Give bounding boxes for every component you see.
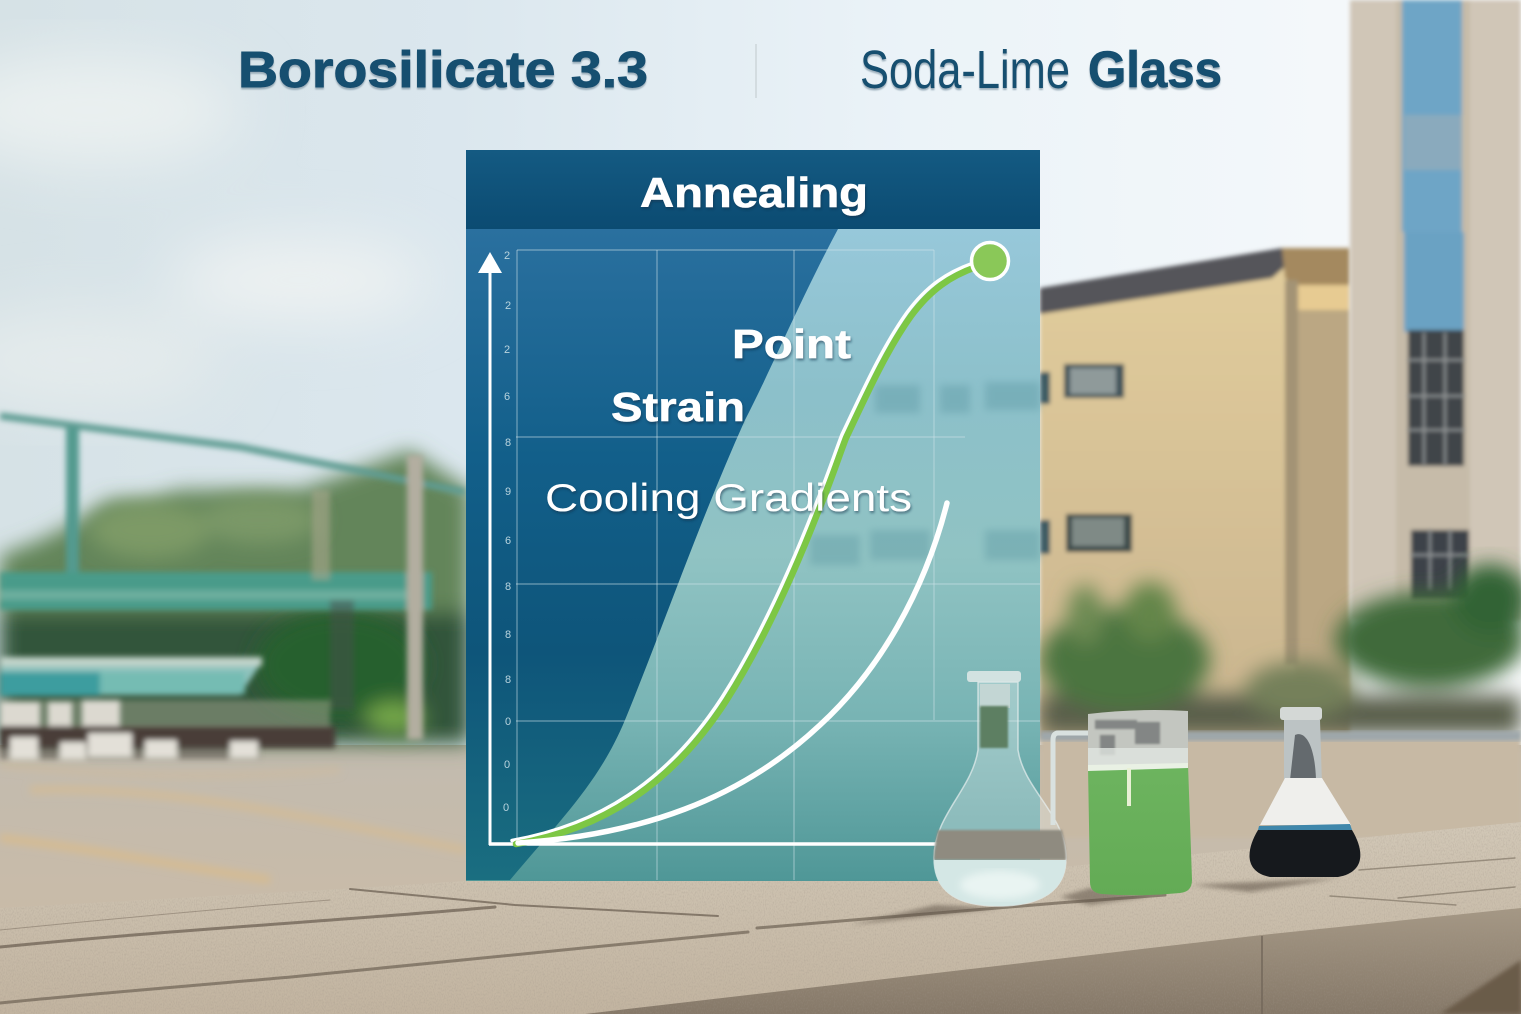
heading: Soda-Lime Glass: Glass <box>1088 41 1222 98</box>
heading: Soda-Lime Glass: Soda-Lime <box>860 40 1070 100</box>
curve: soda-lime (white) <box>518 503 947 843</box>
y-axis scale numbers: 0 <box>504 759 510 771</box>
y-axis scale numbers: 6 <box>505 535 511 547</box>
curve: borosilicate (green) <box>512 264 976 844</box>
end-point marker <box>972 242 1008 280</box>
shadows on ledge <box>850 878 1340 925</box>
y-axis scale numbers: 8 <box>505 437 511 449</box>
stone ledge foreground <box>0 822 1521 1014</box>
y-axis scale numbers: 2 <box>505 300 511 312</box>
panel title: Annealing <box>640 169 868 216</box>
y-axis scale numbers: 8 <box>505 581 511 593</box>
heading: Borosilicate 3.3: Borosilicate 3.3 <box>238 41 648 98</box>
y-axis scale numbers: 9 <box>505 486 511 498</box>
label: Strain: Strain <box>611 384 745 430</box>
road surface <box>0 745 1521 915</box>
flask: conical dark liquid <box>1249 707 1360 877</box>
y-axis scale numbers: 0 <box>503 802 509 814</box>
beaker: green liquid <box>1053 710 1192 895</box>
panel header <box>466 150 1040 229</box>
panel body: dark zone <box>466 229 838 880</box>
y-axis scale numbers: 2 <box>504 344 510 356</box>
beige building <box>1040 248 1350 740</box>
y-axis scale numbers: 6 <box>504 391 510 403</box>
y-axis scale numbers: 8 <box>505 629 511 641</box>
chart grid <box>516 250 1040 880</box>
bushes at right <box>1040 564 1521 838</box>
label: Point: Point <box>732 321 851 367</box>
flask: round-bottom clear <box>934 671 1066 906</box>
label: Cooling Gradients: Cooling Gradients <box>545 477 912 520</box>
panel: annealing chart <box>466 150 1040 881</box>
y-axis scale numbers: 2 <box>504 250 510 262</box>
y-axis scale numbers: 8 <box>505 674 511 686</box>
tree line and bridge <box>0 416 470 759</box>
x axis <box>489 842 945 846</box>
y-axis scale numbers: 0 <box>505 716 511 728</box>
divider between headings <box>755 44 757 98</box>
panel body: light zone <box>466 229 1040 881</box>
tower <box>1350 0 1521 620</box>
reflected windows seen through panel <box>810 382 1040 565</box>
y-axis scale numbers <box>503 250 511 814</box>
y axis arrow <box>478 252 502 845</box>
